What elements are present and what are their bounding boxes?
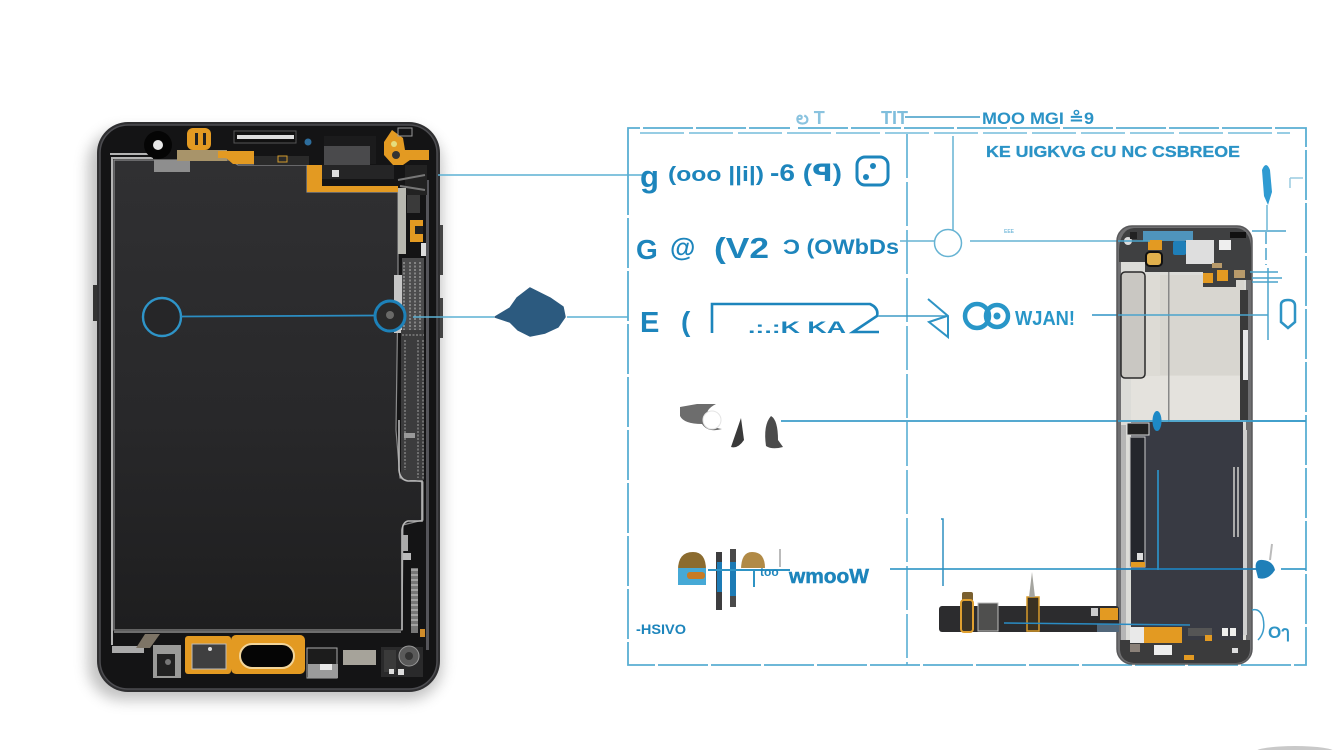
lower dark panel (1131, 422, 1243, 642)
label row 2 (636, 232, 899, 265)
corner shadow (1255, 746, 1335, 750)
connector lines from phone to diagram (413, 175, 642, 317)
label row 3: .:.:K KA (748, 318, 846, 337)
right phone: back view with battery (1117, 226, 1252, 664)
icon: triangle prism (928, 299, 948, 337)
blue callouts on right phone (1116, 241, 1306, 579)
bottom component strip (112, 634, 423, 678)
top heading: TIT (881, 108, 908, 128)
left phone: front view with open frame (88, 122, 443, 700)
label row 2: (V2 (714, 233, 769, 265)
label row 1: -6 (ꟼ) (770, 160, 842, 187)
icon: blue guitar pick (495, 288, 565, 336)
parts row with label: wmooW (788, 566, 869, 588)
small bottom-left label: -HSIVO (636, 621, 686, 637)
flat flex cable (939, 572, 1190, 632)
battery area (1143, 275, 1244, 422)
small parts row: clip pieces (680, 404, 783, 448)
label row 1 (640, 157, 888, 194)
label: go (965, 304, 1075, 330)
parts row with label (678, 549, 869, 610)
bottom board (1120, 627, 1250, 663)
label row 3: E (640, 307, 659, 339)
top heading (796, 108, 1094, 128)
label row 2: @ (670, 232, 695, 262)
label row 2: Ɔ (OWbDs (783, 236, 899, 259)
subheading: KE UIGKVG CU NC CSBREOE (986, 144, 1240, 161)
top board (1119, 228, 1251, 287)
small bottom-right label (1252, 610, 1290, 642)
right side components (394, 188, 426, 637)
parts row with label: too (760, 565, 779, 579)
label row 3 (640, 304, 946, 339)
connector circle (781, 136, 1306, 586)
top heading: ల T (796, 108, 825, 128)
tool and measure marks, right margin (1250, 165, 1303, 340)
text: EEE (1004, 229, 1015, 235)
label row 2: G (636, 234, 658, 265)
label row 3: ( (681, 306, 691, 337)
diagram frame (628, 128, 1306, 665)
label: go: WJAN! (1015, 308, 1075, 330)
top component strip (144, 128, 429, 195)
screen panel (114, 160, 423, 630)
label row 1: (ooo ||i|) (668, 164, 764, 186)
blue marker circles and link (143, 298, 405, 336)
top heading: MOO MGI ≗9 (982, 109, 1094, 128)
label row 1: g (640, 159, 659, 194)
small bottom-right label: Oๅ (1268, 623, 1290, 642)
